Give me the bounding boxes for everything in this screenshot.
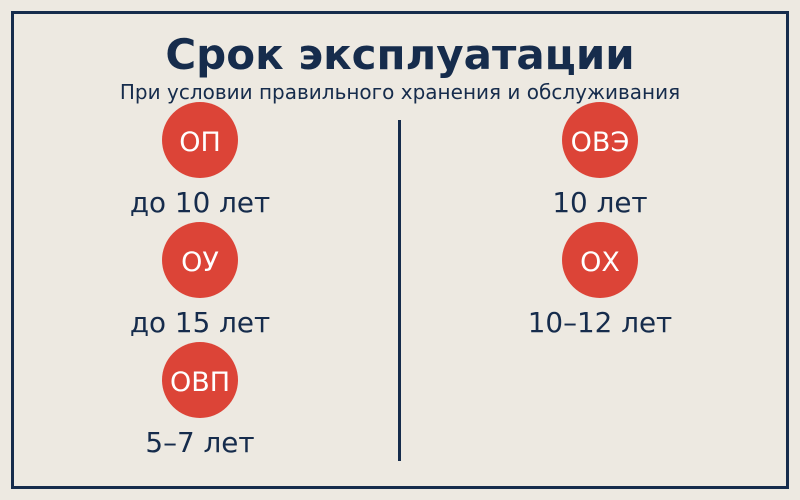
divider: [398, 120, 401, 461]
icon: ОП circle: ОП: [179, 127, 221, 158]
title: Срок эксплуатации: [165, 30, 635, 79]
icon: ОХ circle: ОХ: [580, 247, 620, 278]
icon: ОУ circle: [162, 222, 238, 298]
item: ОУ: [130, 222, 270, 339]
value: ОХ: 10–12 лет: [528, 306, 672, 339]
icon: ОУ circle: ОУ: [181, 247, 219, 278]
value: ОВЭ: 10 лет: [552, 186, 648, 219]
item: ОП: [130, 102, 270, 219]
item: ОХ: [528, 222, 672, 339]
value: ОП: до 10 лет: [130, 186, 270, 219]
icon: ОП circle: [162, 102, 238, 178]
subtitle: При условии правильного хранения и обслуживания: [120, 80, 680, 104]
value: ОУ: до 15 лет: [130, 306, 270, 339]
value: ОВП: 5–7 лет: [145, 426, 255, 459]
icon: ОВП circle: [162, 342, 238, 418]
icon: ОВП circle: ОВП: [170, 367, 230, 398]
icon: ОВЭ circle: [562, 102, 638, 178]
icon: ОВЭ circle: ОВЭ: [571, 127, 629, 158]
item: ОВП: [145, 342, 255, 459]
icon: ОХ circle: [562, 222, 638, 298]
item: ОВЭ: [552, 102, 648, 219]
